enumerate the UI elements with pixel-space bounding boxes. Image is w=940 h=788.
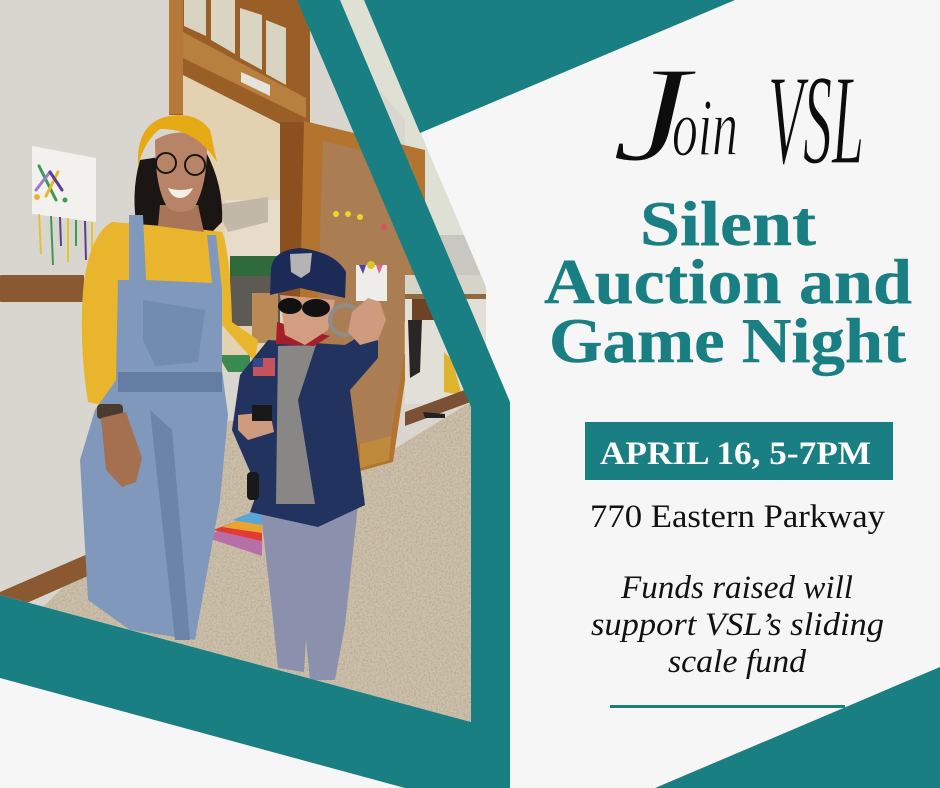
child in police costume <box>232 248 386 680</box>
interior wall and chalkboard <box>222 197 280 372</box>
panel: photo of woman and child in costumes <box>0 0 490 730</box>
pointing hand <box>348 298 386 345</box>
grey sweatpants <box>260 505 358 680</box>
neck <box>158 205 204 232</box>
wall rail and baseboard <box>0 275 90 606</box>
address: 770 Eastern Parkway <box>590 499 886 535</box>
hand <box>101 412 142 487</box>
date banner: APRIL 16, 5-7PM <box>600 436 871 472</box>
description text <box>591 570 884 680</box>
bottom-right teal triangle <box>655 667 940 788</box>
watch <box>97 404 123 419</box>
description text: support VSL’s sliding <box>591 607 884 643</box>
open door <box>300 121 425 480</box>
wall poster with ribbons <box>32 146 96 265</box>
navy jacket <box>232 325 378 527</box>
hallway shelf, drawings, and coats <box>405 235 490 426</box>
note on door <box>356 261 387 301</box>
cap badge <box>290 253 312 278</box>
beanie <box>138 115 217 166</box>
hair <box>134 153 222 231</box>
script heading: Join VSL: oin <box>672 82 738 173</box>
diagonal teal band with lower frame <box>0 0 510 788</box>
face <box>155 132 207 212</box>
glasses <box>156 153 205 175</box>
divider line <box>610 705 845 708</box>
transom windows and door frame <box>169 0 310 302</box>
title: Silent Auction and Game Night: Auction and <box>544 246 912 317</box>
denim overalls <box>80 215 228 640</box>
script heading: Join VSL: J <box>612 39 697 190</box>
script heading: Join VSL <box>612 39 864 191</box>
right-hand wall <box>340 0 480 275</box>
grey sweater <box>276 345 316 504</box>
smile <box>168 188 193 198</box>
red collar <box>276 322 330 346</box>
date banner <box>585 422 893 480</box>
face <box>280 295 335 345</box>
handcuffs <box>330 305 360 335</box>
rainbow rug <box>213 512 262 556</box>
yellow long-sleeve shirt <box>82 222 258 408</box>
child's hand holding radio <box>238 412 274 440</box>
sunglasses <box>278 298 330 317</box>
doorway interior <box>183 75 285 370</box>
floor <box>44 404 471 722</box>
radio on cord <box>247 472 259 500</box>
top teal triangle <box>364 0 735 133</box>
title: Silent Auction and Game Night: Game Night <box>549 305 907 376</box>
woman in yellow shirt and denim overalls <box>80 115 258 640</box>
police cap <box>270 248 346 298</box>
title: Silent Auction and Game Night <box>544 188 912 376</box>
flag patch <box>253 358 275 376</box>
description text: scale fund <box>668 644 807 680</box>
description text: Funds raised will <box>620 570 853 606</box>
wall <box>0 0 490 620</box>
star stickers <box>333 211 363 220</box>
title: Silent Auction and Game Night: Silent <box>640 188 817 259</box>
